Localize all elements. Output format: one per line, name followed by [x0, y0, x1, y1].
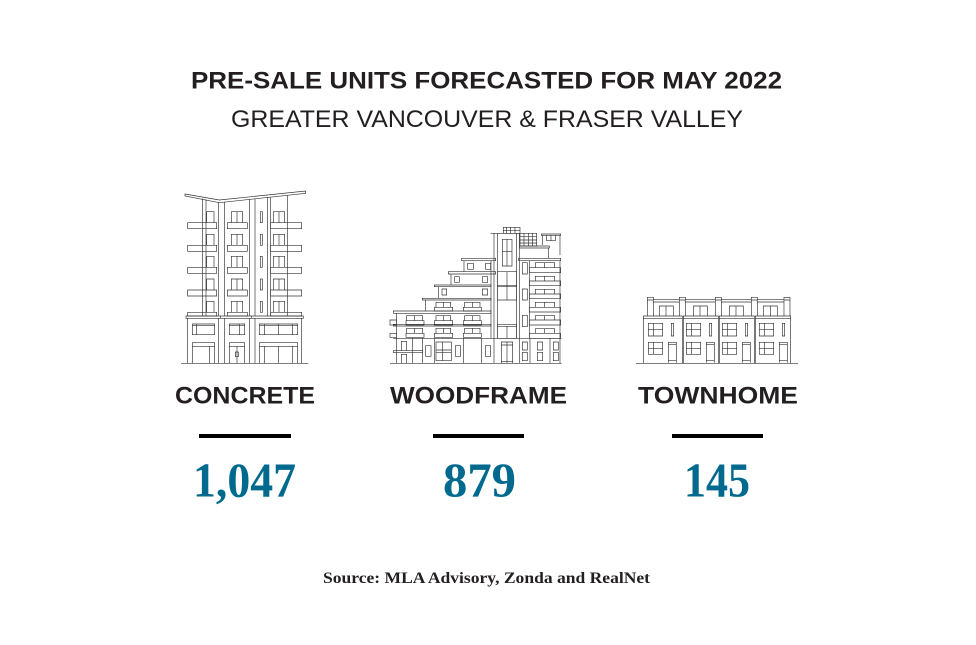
divider: woodframe — [433, 434, 524, 438]
icon: concrete building — [181, 191, 308, 363]
number: concrete: 1,047 — [193, 452, 296, 508]
label: concrete: CONCRETE — [175, 382, 315, 410]
icon: townhome building — [636, 297, 798, 363]
label: townhome: TOWNHOME — [638, 382, 798, 410]
number: townhome: 145 — [684, 452, 750, 508]
title: PRE-SALE UNITS FORECASTED FOR MAY 2022 — [191, 68, 782, 94]
icon: woodframe building — [390, 227, 562, 363]
source note: Source: MLA Advisory, Zonda and RealNet — [323, 570, 651, 587]
divider: concrete — [199, 434, 291, 438]
subtitle: GREATER VANCOUVER & FRASER VALLEY — [231, 106, 743, 133]
number: woodframe: 879 — [443, 452, 516, 508]
divider: townhome — [672, 434, 763, 438]
label: woodframe: WOODFRAME — [390, 382, 567, 410]
